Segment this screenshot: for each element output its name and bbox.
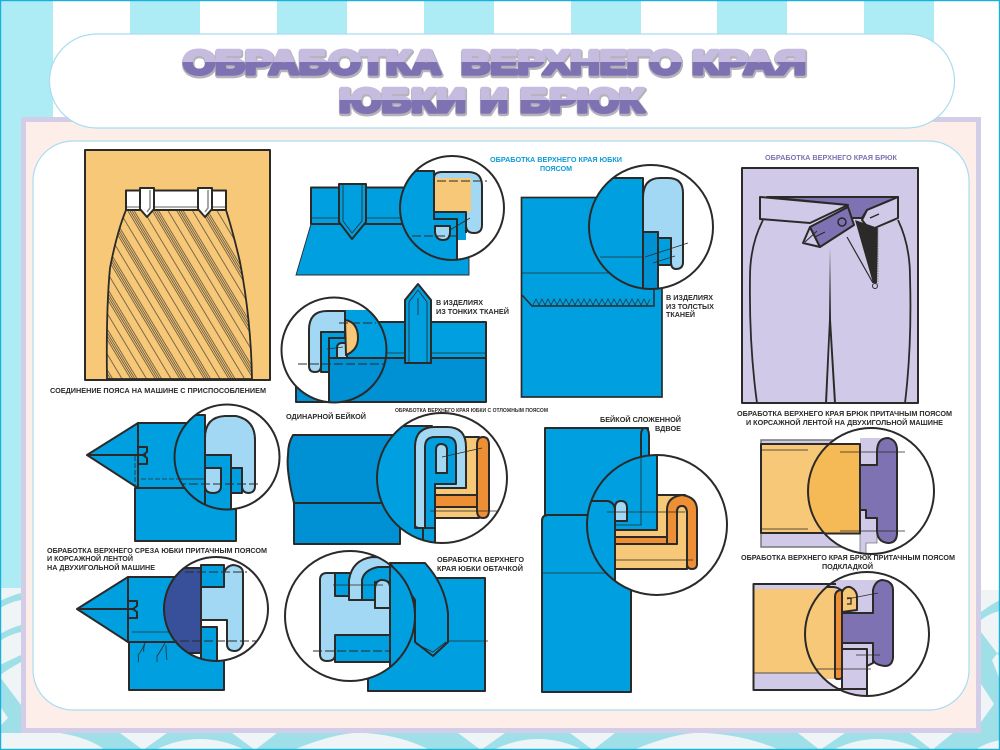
facing flap	[390, 563, 448, 656]
overlock seam	[522, 288, 654, 306]
label: trousers lining caption: ПОДКЛАДКОЙ	[822, 562, 873, 571]
magnifier	[800, 428, 934, 555]
inner waistband	[767, 197, 898, 218]
panel: pink mat	[26, 122, 976, 728]
panel: waistband, thick fabrics	[522, 165, 713, 397]
label: skirt double-needle caption	[47, 546, 267, 572]
label: double binding	[600, 415, 681, 433]
panel: double-needle skirt bottom	[77, 557, 268, 690]
label: thick fabrics	[666, 293, 714, 319]
label: facing caption	[437, 555, 524, 573]
title: ЮБКИ	[340, 84, 466, 122]
panel: double-needle skirt top	[87, 404, 280, 541]
belt loop	[339, 184, 366, 239]
title: ВЕРХНЕГО	[461, 44, 681, 82]
loose threads	[138, 643, 167, 662]
panel: waistband, thin fabrics, bottom	[282, 284, 486, 405]
panel: trousers	[742, 168, 918, 403]
magnifier	[163, 556, 269, 662]
label: skirt sewing caption: СОЕДИНЕНИЕ ПОЯСА НА МАШИНЕ С ПРИСПОСОБЛЕНИЕМ	[50, 386, 266, 395]
panel: waistband, thin fabrics, top	[296, 156, 504, 275]
label: thick fabrics: В ИЗДЕЛИЯХ	[666, 293, 713, 302]
label: trousers lining caption	[741, 553, 955, 571]
panel: trousers waistband with lining	[754, 572, 929, 700]
waistband tab	[803, 227, 820, 247]
label: thick fabrics: ИЗ ТОЛСТЫХ	[666, 302, 714, 311]
label: trousers tape caption	[737, 409, 952, 427]
title	[183, 44, 806, 122]
label: skirt double-needle caption: НА ДВУХИГОЛЬНОЙ МАШИНЕ	[47, 563, 155, 572]
magnifier	[282, 298, 392, 405]
skirt body with hatching	[107, 210, 252, 379]
magnifier	[585, 165, 713, 292]
title pill	[50, 34, 954, 128]
magnifier	[170, 404, 280, 510]
fly	[855, 220, 878, 283]
folded tip	[87, 423, 138, 488]
title: И	[480, 84, 508, 122]
label: skirt double-needle caption: И КОРСАЖНОЙ ЛЕНТОЙ	[47, 554, 133, 563]
label: skirt double-needle caption: ОБРАБОТКА ВЕРХНЕГО СРЕЗА ЮБКИ ПРИТАЧНЫМ ПОЯСОМ	[47, 546, 267, 555]
left waistband	[760, 197, 848, 223]
panel: white content area	[33, 141, 969, 710]
heading: skirt waistband: ПОЯСОМ	[540, 164, 572, 173]
panel: trousers waistband with tape	[761, 428, 934, 555]
magnifier	[370, 413, 507, 545]
label: double binding: БЕЙКОЙ СЛОЖЕННОЙ	[600, 415, 681, 424]
right waistband	[862, 197, 898, 230]
title: ОБРАБОТКА	[184, 46, 442, 84]
panel: outer lilac frame	[21, 117, 981, 733]
title: КРАЯ	[692, 44, 806, 82]
panel: skirt illustration	[85, 150, 270, 380]
label: facing caption: КРАЯ ЮБКИ ОБТАЧКОЙ	[437, 564, 523, 573]
label: thick fabrics: ТКАНЕЙ	[666, 310, 695, 319]
panel: facing finish	[285, 551, 488, 691]
belt loop	[405, 284, 431, 363]
title: КРАЯ	[692, 46, 806, 84]
heading: skirt waistband: ОБРАБОТКА ВЕРХНЕГО КРАЯ ЮБКИ	[490, 155, 622, 164]
label: trousers tape caption: И КОРСАЖНОЙ ЛЕНТОЙ НА ДВУХИГОЛЬНОЙ МАШИНЕ	[746, 418, 943, 427]
title: И	[480, 82, 508, 120]
magnifier	[284, 550, 414, 682]
label: single binding: ОДИНАРНОЙ БЕЙКОЙ	[286, 412, 366, 421]
title: ЮБКИ	[339, 82, 466, 120]
heading: trousers: ОБРАБОТКА ВЕРХНЕГО КРАЯ БРЮК	[765, 153, 898, 162]
label: facing caption: ОБРАБОТКА ВЕРХНЕГО	[437, 555, 524, 564]
panel: single binding	[288, 413, 507, 545]
title: ВЕРХНЕГО	[462, 46, 682, 84]
folded tip	[77, 577, 128, 642]
title: БРЮК	[520, 84, 645, 122]
waistband	[126, 190, 226, 210]
heading: skirt waistband	[490, 155, 622, 173]
magnifier	[800, 572, 929, 700]
title: БРЮК	[520, 82, 644, 120]
trouser legs	[750, 220, 910, 403]
magnifier	[585, 455, 727, 595]
belt loops	[140, 188, 212, 217]
label: double binding: ВДВОЕ	[655, 424, 681, 433]
panel: double-folded binding	[542, 428, 727, 692]
label: thin fabrics	[436, 298, 509, 316]
label: turned-down waistband: ОБРАБОТКА ВЕРХНЕГО КРАЯ ЮБКИ С ОТЛОЖНЫМ ПОЯСОМ	[395, 408, 548, 414]
label: trousers lining caption: ОБРАБОТКА ВЕРХНЕГО КРАЯ БРЮК ПРИТАЧНЫМ ПОЯСОМ	[741, 553, 955, 562]
magnifier	[395, 156, 504, 265]
label: thin fabrics: В ИЗДЕЛИЯХ	[436, 298, 483, 307]
label: thin fabrics: ИЗ ТОНКИХ ТКАНЕЙ	[436, 307, 509, 316]
title: ОБРАБОТКА	[183, 44, 441, 82]
label: trousers tape caption: ОБРАБОТКА ВЕРХНЕГО КРАЯ БРЮК ПРИТАЧНЫМ ПОЯСОМ	[737, 409, 952, 418]
